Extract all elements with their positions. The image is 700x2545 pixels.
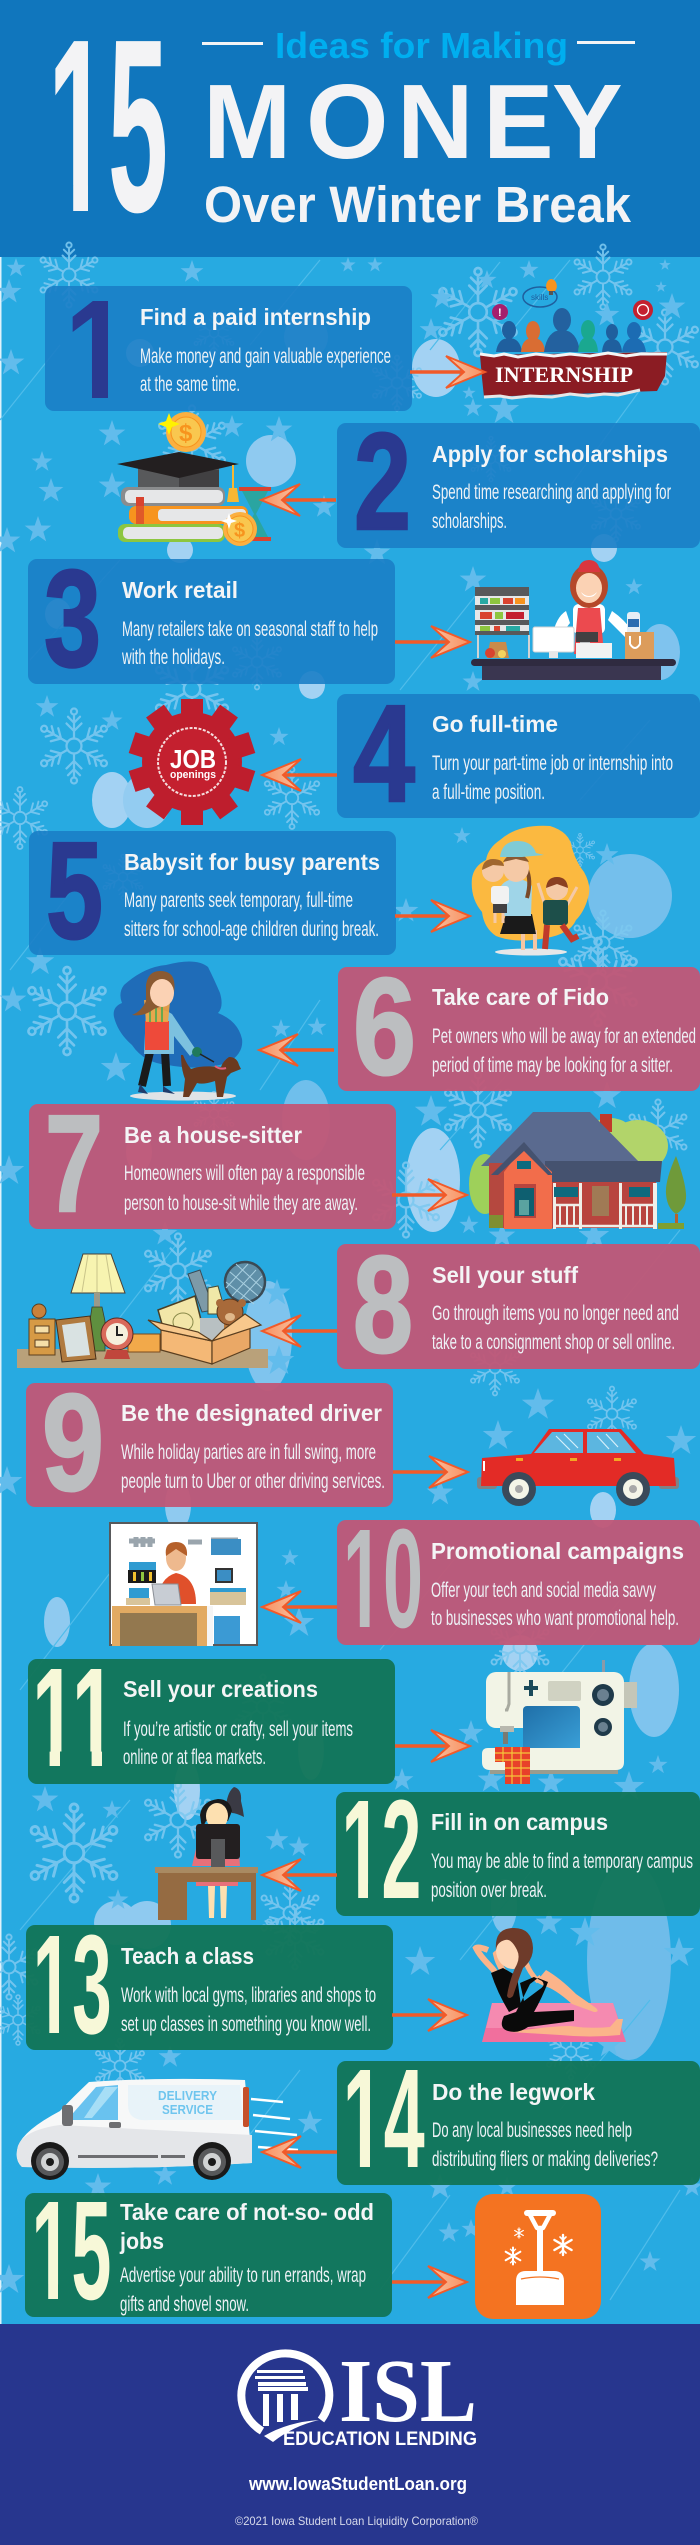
description bbox=[431, 1849, 693, 1902]
icon: woman behind a computer desk bbox=[155, 1787, 258, 1920]
number 5: 5 bbox=[46, 814, 103, 968]
description: Homeowners will often pay a responsible bbox=[124, 1161, 365, 1185]
icon: internship banner with people: INTERNSHIP bbox=[495, 362, 633, 387]
description bbox=[432, 751, 673, 804]
icon: red car bbox=[477, 1429, 679, 1506]
number 10: 10 bbox=[343, 1499, 423, 1657]
ISL logo bbox=[241, 2342, 477, 2450]
heading: Do the legwork bbox=[432, 2079, 595, 2105]
icon: woman exercising on a mat bbox=[476, 1928, 626, 2042]
description: set up classes in something you know well. bbox=[121, 2012, 371, 2036]
number 15: 15 bbox=[31, 2171, 111, 2329]
logo wordmark ISL: ISL bbox=[339, 2342, 477, 2441]
description: Work with local gyms, libraries and shops to bbox=[121, 1983, 376, 2007]
description bbox=[120, 2263, 366, 2316]
description bbox=[140, 344, 391, 396]
icon: delivery van bbox=[17, 2079, 298, 2180]
header band bbox=[0, 0, 700, 257]
heading: Take care of not-so- odd bbox=[120, 2199, 374, 2225]
logo tagline: EDUCATION LENDING bbox=[283, 2429, 477, 2450]
icon: snow shovel on orange tile bbox=[475, 2194, 601, 2319]
description bbox=[124, 1161, 365, 1215]
arrow 9 bbox=[393, 1456, 468, 1488]
heading: Fill in on campus bbox=[431, 1809, 608, 1835]
icon: cashier at retail counter bbox=[471, 560, 676, 680]
panel 11: sell your creations bbox=[28, 1659, 395, 1784]
panel 7: be a house-sitter bbox=[29, 1087, 396, 1241]
title bbox=[55, 32, 635, 222]
description: at the same time. bbox=[140, 372, 240, 396]
panel 4: go full-time bbox=[337, 677, 700, 831]
icon: internship banner with people: ! bbox=[498, 307, 502, 319]
rule right bbox=[577, 41, 635, 44]
description: online or at flea markets. bbox=[123, 1745, 266, 1769]
description bbox=[121, 1440, 385, 1493]
website: www.IowaStudentLoan.org bbox=[248, 2474, 467, 2494]
heading: Babysit for busy parents bbox=[124, 849, 380, 875]
panel 8: sell your stuff bbox=[337, 1228, 700, 1382]
icon: job openings gear: JOB bbox=[170, 744, 216, 774]
description bbox=[432, 1301, 679, 1354]
arrow 14 bbox=[262, 2136, 337, 2168]
description: Many retailers take on seasonal staff to help bbox=[122, 617, 378, 641]
panel 6: take care of Fido bbox=[338, 950, 700, 1104]
arrow 12 bbox=[262, 1859, 337, 1891]
panel 15: take care of not-so- odd jobs bbox=[25, 2193, 392, 2317]
description: While holiday parties are in full swing, more bbox=[121, 1440, 376, 1464]
icon: job openings gear bbox=[129, 699, 255, 825]
number 3: 3 bbox=[44, 542, 101, 696]
arrow 2 bbox=[261, 484, 336, 516]
heading: jobs bbox=[119, 2228, 164, 2254]
panel 13: teach a class bbox=[26, 1925, 393, 2050]
number 1: 1 bbox=[65, 270, 130, 428]
number 12: 12 bbox=[341, 1770, 421, 1928]
description bbox=[124, 888, 379, 941]
rule left bbox=[202, 42, 263, 45]
description bbox=[431, 1578, 679, 1630]
panel 10: promotional campaigns bbox=[337, 1520, 700, 1645]
description: position over break. bbox=[431, 1878, 547, 1902]
number 2: 2 bbox=[354, 405, 411, 559]
footer band bbox=[0, 2324, 700, 2545]
panel 12: fill in on campus bbox=[336, 1792, 700, 1916]
heading: Go full-time bbox=[432, 711, 558, 737]
icon: job openings gear: openings bbox=[170, 769, 216, 781]
arrow 11 bbox=[395, 1730, 470, 1762]
description bbox=[121, 1983, 376, 2036]
heading: Promotional campaigns bbox=[431, 1538, 684, 1564]
icon: woman walking a dog bbox=[114, 961, 242, 1100]
description: a full-time position. bbox=[432, 780, 545, 804]
heading: Find a paid internship bbox=[140, 304, 371, 330]
description bbox=[123, 1717, 353, 1769]
arrow 1 bbox=[410, 356, 485, 388]
icon: graduation cap, books and coins bbox=[117, 412, 271, 546]
description: scholarships. bbox=[432, 509, 507, 533]
arrow 3 bbox=[395, 626, 470, 658]
icon: internship banner with people: skills bbox=[531, 293, 548, 302]
arrow 15 bbox=[392, 2266, 467, 2298]
description: people turn to Uber or other driving services. bbox=[121, 1469, 385, 1493]
panel 9: be the designated driver bbox=[26, 1366, 393, 1520]
number 9: 9 bbox=[42, 1366, 104, 1520]
icon: delivery van: DELIVERY bbox=[158, 2088, 217, 2103]
arrow 13 bbox=[392, 1999, 467, 2031]
icon: man at tech shop desk bbox=[110, 1523, 257, 1646]
description bbox=[121, 617, 378, 669]
icon: graduation cap, books and coins: $ bbox=[234, 520, 245, 542]
description: person to house-sit while they are away. bbox=[124, 1191, 358, 1215]
description: with the holidays. bbox=[121, 645, 225, 669]
description: sitters for school-age children during break. bbox=[124, 917, 379, 941]
description bbox=[432, 480, 671, 533]
number 11: 11 bbox=[32, 1638, 116, 1796]
icon: internship banner with people bbox=[480, 279, 667, 398]
description: Make money and gain valuable experience bbox=[140, 344, 391, 368]
arrow 8 bbox=[262, 1315, 337, 1347]
number 6: 6 bbox=[353, 950, 416, 1104]
logo emblem bbox=[241, 2353, 329, 2442]
panel 5: babysit for busy parents bbox=[29, 814, 396, 968]
heading: Sell your creations bbox=[123, 1676, 318, 1702]
panel 3: work retail bbox=[28, 542, 395, 696]
icon: house bbox=[469, 1112, 686, 1229]
heading: Apply for scholarships bbox=[432, 441, 668, 467]
arrow 7 bbox=[392, 1179, 467, 1211]
number 4: 4 bbox=[353, 677, 415, 831]
heading: Take care of Fido bbox=[432, 984, 609, 1010]
heading: Work retail bbox=[122, 577, 238, 603]
heading: Sell your stuff bbox=[432, 1262, 578, 1288]
icon: babysitter with children bbox=[472, 826, 589, 956]
description: Many parents seek temporary, full-time bbox=[124, 888, 353, 912]
title line: MONEY: MONEY bbox=[203, 63, 623, 181]
description: gifts and shovel snow. bbox=[120, 2292, 249, 2316]
heading: Teach a class bbox=[121, 1943, 254, 1969]
description bbox=[432, 1024, 696, 1077]
panel 2: apply for scholarships bbox=[337, 405, 700, 559]
icon: delivery van: SERVICE bbox=[162, 2102, 213, 2117]
arrow 5 bbox=[395, 900, 470, 932]
panel 1: find a paid internship bbox=[45, 286, 412, 411]
number 14: 14 bbox=[343, 2039, 425, 2197]
icon: graduation cap, books and coins: $ bbox=[179, 420, 193, 447]
number 7: 7 bbox=[45, 1087, 103, 1241]
description: If you’re artistic or crafty, sell your items bbox=[123, 1717, 353, 1741]
heading bbox=[119, 2199, 374, 2254]
icon: sewing machine bbox=[482, 1660, 637, 1784]
arrow 10 bbox=[262, 1591, 337, 1623]
title line: Over Winter Break: Over Winter Break bbox=[204, 176, 632, 233]
description: Advertise your ability to run errands, wrap bbox=[120, 2263, 366, 2287]
number 8: 8 bbox=[353, 1228, 413, 1382]
arrow 4 bbox=[262, 759, 337, 791]
title line: Ideas for Making: Ideas for Making bbox=[275, 25, 568, 66]
panel 14: do the legwork bbox=[337, 2061, 700, 2185]
arrow 6 bbox=[259, 1034, 334, 1066]
heading: Be a house-sitter bbox=[124, 1122, 302, 1148]
icon: household items for sale bbox=[17, 1254, 268, 1368]
heading: Be the designated driver bbox=[121, 1400, 382, 1426]
number 13: 13 bbox=[33, 1905, 112, 2063]
copyright: ©2021 Iowa Student Loan Liquidity Corporation® bbox=[235, 2514, 478, 2528]
description bbox=[432, 2118, 658, 2171]
